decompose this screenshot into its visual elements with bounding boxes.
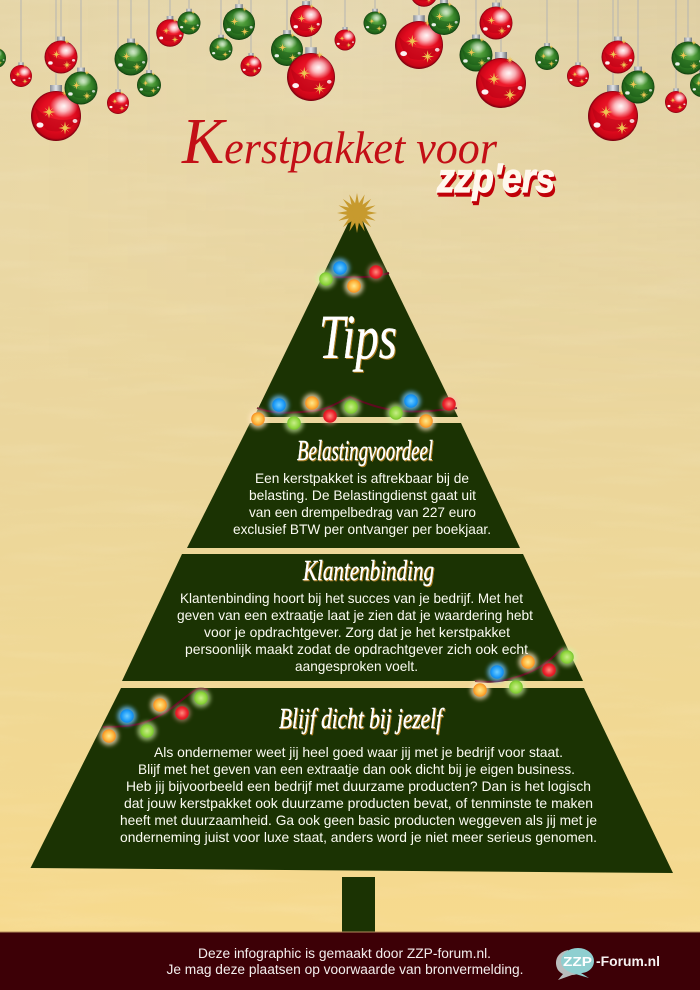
- text: Klantenbinding body: voor je opdrachtgever. Zorg dat je het kerstpakket: [204, 624, 510, 640]
- title: zzp'ers: zzp'ers: [436, 155, 555, 201]
- bauble: red: [480, 3, 512, 39]
- tree trunk: [342, 877, 375, 933]
- bauble: green: [460, 35, 492, 72]
- bauble: green: [114, 39, 148, 76]
- string lights: right: [470, 648, 576, 700]
- panel: tree top with Tips: [254, 207, 458, 417]
- text: Belastingvoordeel body: [233, 470, 491, 537]
- bauble: red at top edge: [410, 0, 438, 7]
- bauble: green: [64, 68, 98, 104]
- icon: gold star tree topper: [337, 193, 377, 233]
- text: Belastingvoordeel body: Een kerstpakket is aftrekbaar bij de: [255, 470, 469, 486]
- string lights: under Tips: [248, 392, 458, 432]
- text: Blijf dicht bij jezelf body: onderneming juist voor luxe staat, anders word je niet meer serieus genomen.: [120, 829, 597, 845]
- panel: Belastingvoordeel: [187, 423, 520, 548]
- bauble: green: [223, 4, 255, 40]
- text: Blijf dicht bij jezelf body: dat jouw kerstpakket ook duurzame producten bevat, of tenminste te maken: [124, 795, 593, 811]
- logo: ZZP-Forum.nl: [556, 948, 660, 980]
- bauble: small red: [107, 89, 129, 114]
- bauble: red: [156, 16, 184, 47]
- bauble: small green: [210, 35, 232, 60]
- heading: Blijf dicht bij jezelf: Blijf dicht bij jezelf: [279, 703, 445, 735]
- title: Kerstpakket voor: Kerstpakket voor: [181, 105, 498, 178]
- bauble: small red: [567, 62, 589, 87]
- logo: ZZP-Forum.nl: ZZP: [563, 954, 592, 969]
- footer credit text: Je mag deze plaatsen op voorwaarde van bronvermelding.: [166, 962, 524, 977]
- string lights: left: [100, 688, 210, 746]
- bauble: small green: [178, 9, 200, 34]
- footer credit text: Deze infographic is gemaakt door ZZP-forum.nl.: [198, 946, 491, 961]
- text: Blijf dicht bij jezelf body: Als ondernemer weet jij heel goed waar jij met je bedrijf voor staat.: [154, 744, 563, 760]
- text: Klantenbinding body: Klantenbinding hoort bij het succes van je bedrijf. Met het: [180, 590, 523, 606]
- text: Belastingvoordeel body: exclusief BTW per ontvanger per boekjaar.: [233, 521, 491, 537]
- heading: Tips: Tips: [319, 304, 397, 372]
- text: Klantenbinding body: persoonlijk maakt zodat de opdrachtgever zich ook echt: [185, 641, 528, 657]
- panel: Klantenbinding: [122, 554, 583, 681]
- string lights: top of tree: [316, 258, 389, 296]
- title: [181, 105, 555, 201]
- bauble: big red centre: [287, 47, 335, 101]
- bauble: small green: [364, 9, 386, 34]
- bauble: red: [602, 37, 634, 74]
- text: Klantenbinding body: geven van een extraatje laat je zien dat je waardering hebt: [177, 607, 533, 623]
- bauble: green: [622, 67, 654, 104]
- bauble: green right edge: [672, 38, 700, 74]
- footer: [0, 932, 700, 990]
- bauble: green: [271, 30, 303, 66]
- text: Belastingvoordeel body: van een drempelbedrag van 227 euro: [249, 504, 476, 520]
- bauble: big red right: [588, 85, 638, 141]
- bauble: small green: [137, 70, 161, 97]
- bauble: big red: [476, 52, 526, 108]
- bauble: big red left: [31, 85, 81, 141]
- bauble: red: [44, 37, 78, 74]
- text: Blijf dicht bij jezelf body: heeft met duurzaamheid. Ga ook geen basic producten weggeven als jij met je: [120, 812, 597, 828]
- bauble: red top: [290, 1, 322, 37]
- bauble: small green: [535, 43, 559, 70]
- heading: Belastingvoordeel: Belastingvoordeel: [297, 436, 433, 467]
- bauble: small red: [334, 27, 356, 50]
- footer credit text: [166, 946, 524, 977]
- bauble: green left edge: [0, 46, 6, 68]
- text: Blijf dicht bij jezelf body: [120, 744, 597, 845]
- text: Klantenbinding body: [177, 590, 533, 674]
- bauble: small red far left: [10, 62, 32, 87]
- bauble: green: [428, 0, 460, 35]
- text: Belastingvoordeel body: belasting. De Belastingdienst gaat uit: [249, 487, 476, 503]
- bauble: small red: [240, 53, 262, 76]
- bauble: green at right edge: [690, 70, 700, 97]
- text: Blijf dicht bij jezelf body: Blijf met het geven van een extraatje dan ook dicht bij je eigen business.: [138, 761, 575, 777]
- hanging baubles: [0, 0, 700, 141]
- heading: Klantenbinding: Klantenbinding: [302, 555, 434, 587]
- bauble: big red: [395, 15, 443, 69]
- text: Klantenbinding body: aangesproken voelt.: [295, 658, 418, 674]
- bauble: small red right: [665, 88, 687, 113]
- text: Blijf dicht bij jezelf body: Heb jij bijvoorbeeld een bedrijf met duurzame producten? Dan is het logisch: [126, 778, 591, 794]
- panel: Blijf dicht bij jezelf: [30, 688, 673, 873]
- logo: ZZP-Forum.nl: -Forum.nl: [596, 954, 660, 969]
